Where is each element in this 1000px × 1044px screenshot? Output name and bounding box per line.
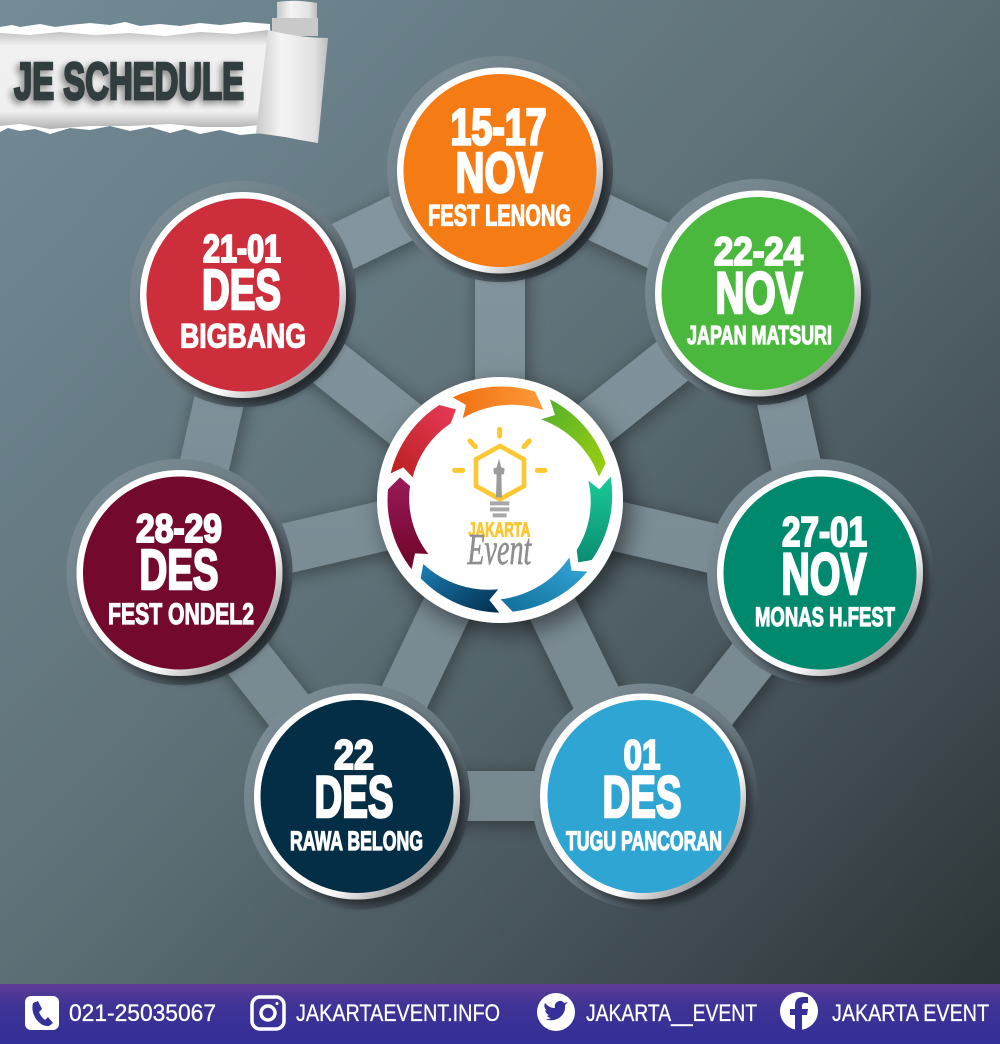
- event: 01 Des Tugu Pancoran: TUGU PANCORAN: [566, 826, 722, 856]
- event: 21-01 Des Bigbang: [130, 181, 356, 407]
- curl body: [256, 30, 328, 143]
- event: 27-01 Nov Monas H.Fest: [707, 459, 933, 685]
- logo: Jakarta Event lightbulb: [455, 429, 545, 574]
- connector network: [180, 170, 820, 796]
- event: 15-17 Nov Fest Lenong: [387, 56, 613, 282]
- event: 01 Des Tugu Pancoran: DES: [602, 765, 682, 830]
- logo: Jakarta Event lightbulb: Event: [467, 525, 532, 574]
- logo: Jakarta Event lightbulb: JAKARTA: [468, 519, 530, 541]
- event: 28-29 Des Fest Ondel2: [66, 459, 292, 685]
- event: 01 Des Tugu Pancoran: [532, 684, 758, 910]
- event: 22-24 Nov Japan Matsuri: 22-24: [714, 230, 804, 274]
- event: 27-01 Nov Monas H.Fest: NOV: [782, 542, 867, 607]
- footer bar: [0, 984, 1000, 1044]
- paper inner: [0, 30, 268, 129]
- icon: phone: [25, 996, 59, 1030]
- event: 22-24 Nov Japan Matsuri: NOV: [716, 261, 803, 326]
- event: 01 Des Tugu Pancoran: 01: [624, 731, 660, 778]
- event: 21-01 Des Bigbang: DES: [202, 258, 281, 322]
- event: 22 Des Rawa Belong: DES: [314, 765, 394, 830]
- event: 28-29 Des Fest Ondel2: DES: [140, 538, 218, 602]
- event: 22 Des Rawa Belong: 22: [334, 731, 374, 778]
- paper strip: [0, 22, 272, 135]
- icon: instagram: [252, 997, 284, 1029]
- cycle arrows: [388, 386, 612, 613]
- event: 22 Des Rawa Belong: RAWA BELONG: [290, 826, 423, 856]
- event: 22-24 Nov Japan Matsuri: JAPAN MATSURI: [687, 320, 832, 350]
- hub disc: [377, 377, 623, 623]
- contact: phone number: 021-25035067: [69, 1000, 216, 1027]
- contact: twitter handle: JAKARTA__EVENT: [586, 1000, 757, 1027]
- icon: twitter: [537, 993, 575, 1031]
- curl top: [277, 1, 317, 33]
- event: 27-01 Nov Monas H.Fest: MONAS H.FEST: [755, 602, 895, 632]
- event: 15-17 Nov Fest Lenong: 15-17: [450, 98, 546, 156]
- event: 28-29 Des Fest Ondel2: FEST ONDEL2: [108, 598, 254, 631]
- event: 21-01 Des Bigbang: BIGBANG: [180, 318, 306, 356]
- event: 22 Des Rawa Belong: [244, 684, 470, 910]
- centre hub: [377, 377, 623, 623]
- event: 21-01 Des Bigbang: 21-01: [203, 228, 281, 271]
- event: 28-29 Des Fest Ondel2: 28-29: [136, 507, 222, 551]
- event: 15-17 Nov Fest Lenong: NOV: [456, 141, 542, 205]
- event: 22-24 Nov Japan Matsuri: [645, 179, 871, 405]
- event: 15-17 Nov Fest Lenong: FEST LENONG: [428, 200, 571, 232]
- monument: [493, 459, 505, 497]
- event: 27-01 Nov Monas H.Fest: 27-01: [782, 508, 867, 555]
- contact: website: JAKARTAEVENT.INFO: [296, 1000, 500, 1027]
- torn paper banner: [0, 1, 328, 143]
- heading: JE SCHEDULE: JE SCHEDULE: [14, 53, 244, 111]
- icon: facebook: [780, 992, 818, 1030]
